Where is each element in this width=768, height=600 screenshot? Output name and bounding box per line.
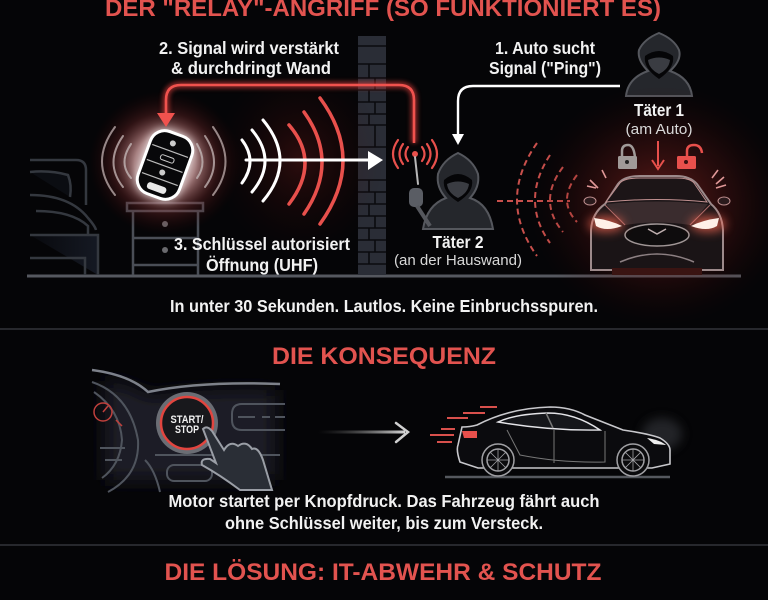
icon: car key fob [133, 126, 197, 204]
label: attacker 2: (an der Hauswand) [394, 252, 522, 269]
icon: nightstand [127, 203, 203, 275]
label: step 2: & durchdringt Wand [171, 58, 331, 78]
label: attacker 2: Täter 2 [432, 232, 484, 252]
car body [457, 407, 670, 468]
dashed signal waves [497, 143, 577, 256]
label: attacker 1: (am Auto) [626, 121, 692, 138]
start stop button [156, 392, 218, 454]
rear wheel [482, 444, 514, 476]
red down arrow [652, 141, 664, 169]
red relay arrow [157, 85, 414, 143]
icon: relay antenna [393, 140, 437, 184]
panel: dashboard with start button [92, 370, 285, 492]
label: step 1: Signal ("Ping") [489, 58, 601, 78]
arrow: result [318, 423, 408, 442]
label: step 2 [159, 38, 339, 78]
car doors [507, 430, 605, 463]
key glow [89, 91, 241, 235]
gauge [94, 403, 122, 426]
icon: front of car [584, 170, 730, 275]
icon: attacker 1 hooded figure [626, 33, 692, 96]
headlight [647, 438, 666, 445]
headlight glow [642, 418, 682, 450]
heading: solution: DIE LÖSUNG: IT-ABWEHR & SCHUTZ [164, 559, 602, 586]
speed lines [430, 407, 497, 442]
label: step 2: 2. Signal wird verstärkt [159, 38, 339, 58]
icon: gray padlock [618, 145, 637, 169]
ground line [445, 476, 670, 478]
ground line [27, 274, 741, 278]
consequence text [168, 491, 600, 533]
label: step 1 [489, 38, 601, 78]
signal arcs around key [102, 127, 226, 195]
label: attacker 2 [394, 232, 522, 269]
icon: red open padlock [677, 145, 702, 169]
consequence text: Motor startet per Knopfdruck. Das Fahrzeug fährt auch [168, 491, 600, 511]
white ping arrow [452, 86, 620, 145]
label: attacker 1 [626, 100, 692, 138]
heading: consequence: DIE KONSEQUENZ [272, 343, 496, 370]
icon: attacker 2 hooded figure [409, 153, 493, 229]
dashboard lines [92, 370, 285, 492]
summary text: In unter 30 Sekunden. Lautlos. Keine Einbruchsspuren. [170, 296, 598, 316]
car windows [498, 413, 600, 430]
panel: relay attack scene [27, 33, 768, 325]
icon: bed [30, 160, 98, 275]
tail light [462, 431, 477, 438]
amplified signal arcs and arrow [215, 65, 385, 255]
icon: pointing hand [202, 427, 272, 490]
label: step 3: 3. Schlüssel autorisiert [174, 234, 350, 254]
label: step 1: 1. Auto sucht [495, 38, 595, 58]
front wheel [617, 444, 649, 476]
label: step 3 [174, 234, 350, 275]
car glow [530, 85, 768, 325]
label: step 3: Öffnung (UHF) [206, 255, 318, 275]
brick wall [358, 36, 386, 275]
label: attacker 1: Täter 1 [634, 100, 684, 120]
panel: driving car [430, 407, 682, 477]
start stop button: START/ [170, 414, 204, 426]
start stop button: STOP [175, 424, 199, 436]
consequence text: ohne Schlüssel weiter, bis zum Versteck. [225, 513, 543, 533]
